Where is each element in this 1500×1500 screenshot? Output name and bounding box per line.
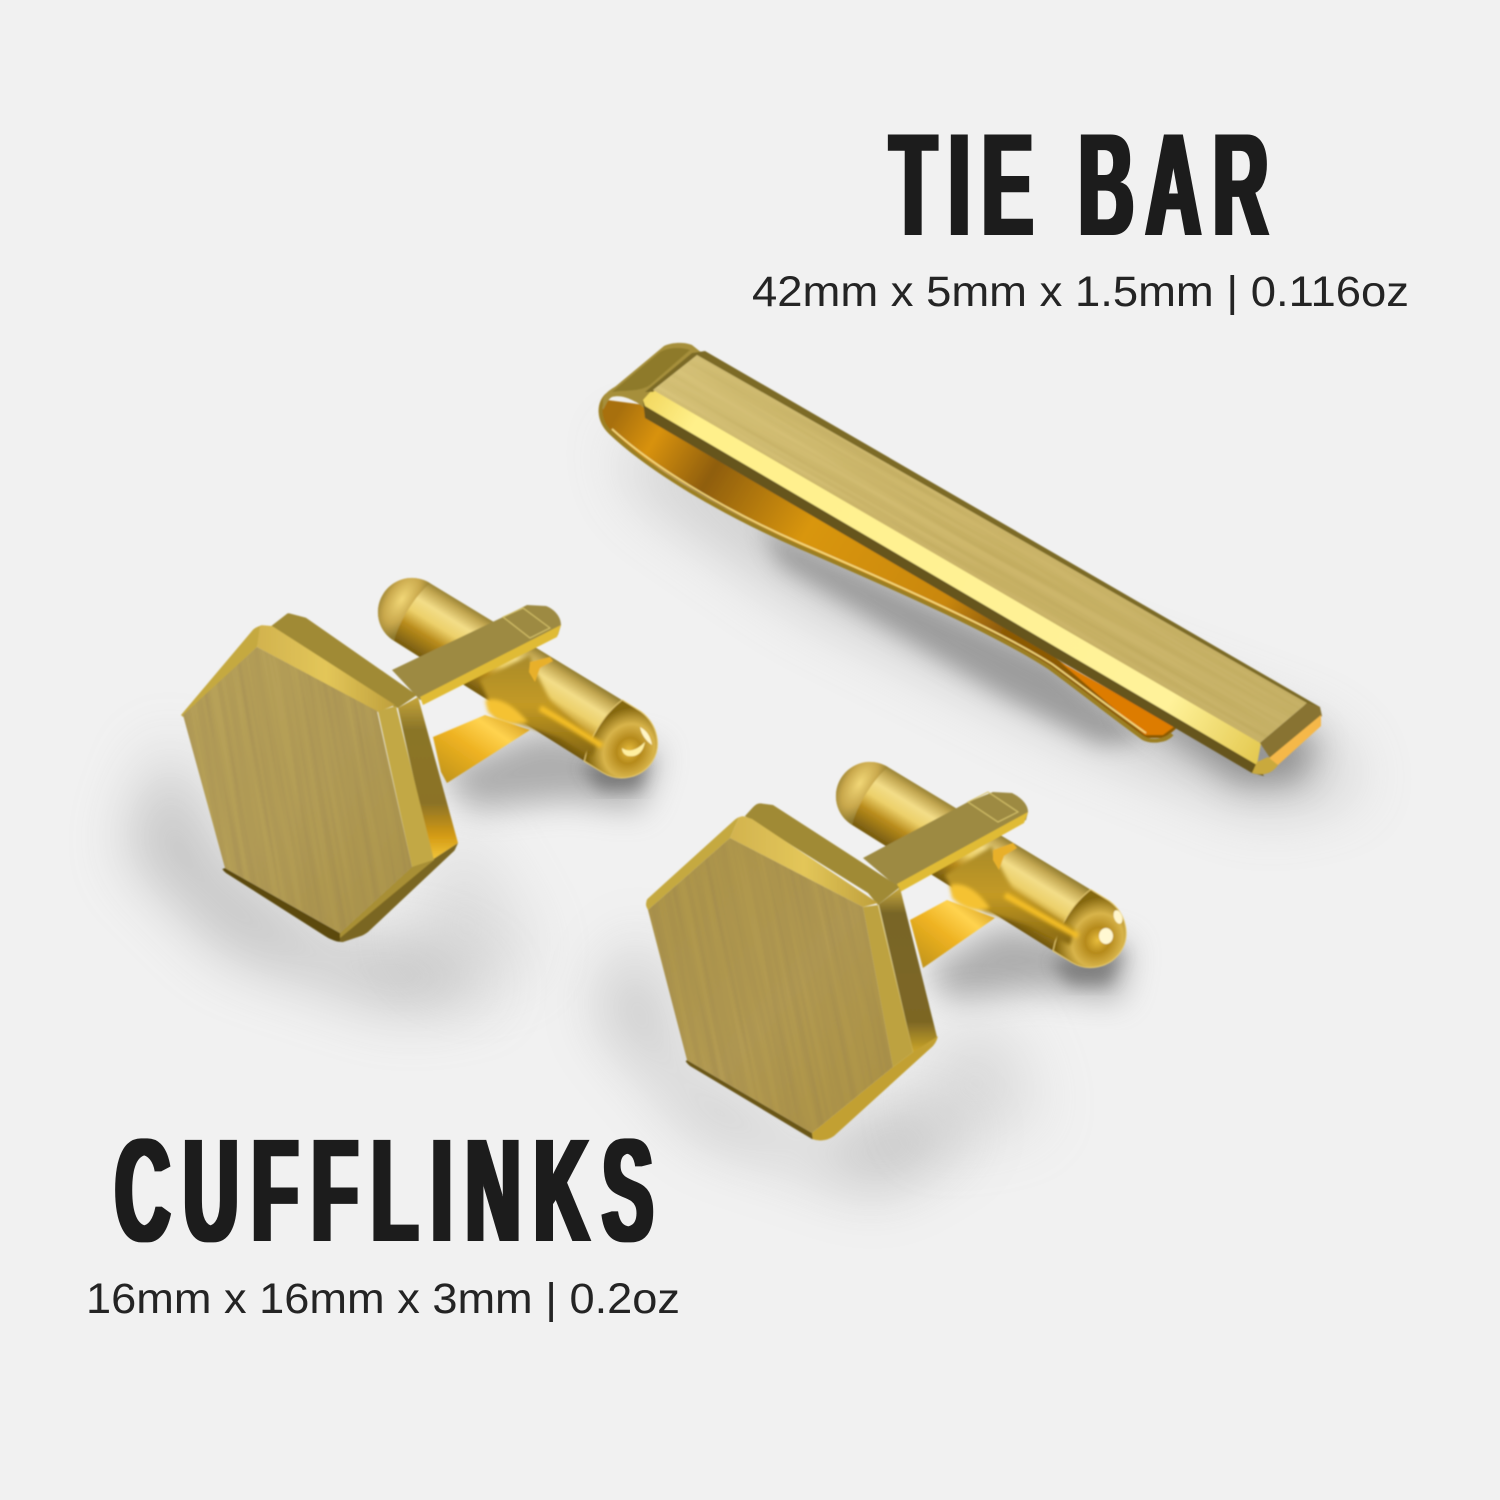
shadow: tie bar <box>620 430 1360 810</box>
neck stripe <box>540 708 602 746</box>
heading: tie bar: TIE BAR <box>890 103 1268 266</box>
end cap <box>579 697 671 792</box>
bottom side <box>812 1035 940 1143</box>
right side <box>398 697 458 860</box>
lower bar <box>433 715 530 783</box>
barrel start cap <box>365 565 430 641</box>
spec: tie bar: 42mm x 5mm x 1.5mm | 0.116oz <box>752 268 1409 316</box>
brush texture <box>184 650 378 924</box>
body <box>180 612 459 944</box>
right side <box>878 888 937 1055</box>
back edge <box>645 351 1320 707</box>
arm <box>392 605 561 700</box>
neck stripe <box>1005 895 1078 936</box>
brushed plate <box>653 355 1307 743</box>
brush texture <box>670 356 1267 738</box>
lower bar <box>910 900 995 968</box>
back clip: rim highlight <box>612 429 1146 733</box>
end orange edge <box>1268 715 1321 765</box>
bottom side <box>340 843 458 943</box>
cap highlight small <box>1112 909 1124 925</box>
right bevel <box>378 706 434 867</box>
neck <box>480 655 597 756</box>
back top side <box>743 803 900 905</box>
spec: cufflinks: 16mm x 16mm x 3mm | 0.2oz <box>86 1275 680 1323</box>
neck <box>945 846 1075 945</box>
body <box>645 802 938 1142</box>
neck cross <box>529 657 553 682</box>
top bevel <box>257 625 395 712</box>
cap reflection <box>622 742 645 756</box>
face <box>183 647 412 933</box>
left bevel <box>181 625 262 717</box>
shadow: right cufflink <box>600 925 1130 1190</box>
shadow: left cufflink <box>130 730 660 1005</box>
right bevel <box>863 905 913 1067</box>
end bevel <box>1260 703 1322 758</box>
heading: cufflinks: CUFFLINKS <box>115 1108 653 1272</box>
cap highlight <box>1099 928 1113 944</box>
lower bevel <box>340 860 434 938</box>
side highlight line <box>878 905 913 1055</box>
top bevel band <box>643 389 1261 765</box>
cufflink: left <box>180 576 659 944</box>
top bevel <box>730 815 878 907</box>
arm etched mark <box>503 608 550 638</box>
neck cross <box>993 843 1017 870</box>
neck blob <box>485 699 528 724</box>
loop upper highlight <box>612 348 690 392</box>
barrel <box>364 563 671 792</box>
arm <box>863 792 1028 887</box>
barrel <box>822 748 1140 981</box>
back clip: inner surface <box>602 400 1178 738</box>
bottom-left dark <box>220 868 340 943</box>
back top side <box>270 613 417 708</box>
brush texture <box>663 884 832 1089</box>
cap highlight <box>640 727 652 745</box>
arm etched mark <box>968 792 1018 822</box>
neck blob <box>950 884 990 910</box>
barrel start cap <box>823 749 888 825</box>
cufflink: right <box>645 760 1128 1142</box>
back clip: rim <box>601 395 1172 741</box>
back loop top <box>603 343 702 410</box>
face <box>648 838 893 1133</box>
bottom-left dark <box>683 1060 813 1141</box>
tie bar <box>598 342 1323 777</box>
back clip: lower orange tip <box>1060 662 1175 735</box>
side under bevel <box>643 400 1264 776</box>
arm gold edge <box>897 812 1028 892</box>
left bevel <box>644 815 740 910</box>
arm gold edge <box>420 625 561 705</box>
end corner <box>1252 757 1278 774</box>
end cap <box>1048 886 1140 981</box>
